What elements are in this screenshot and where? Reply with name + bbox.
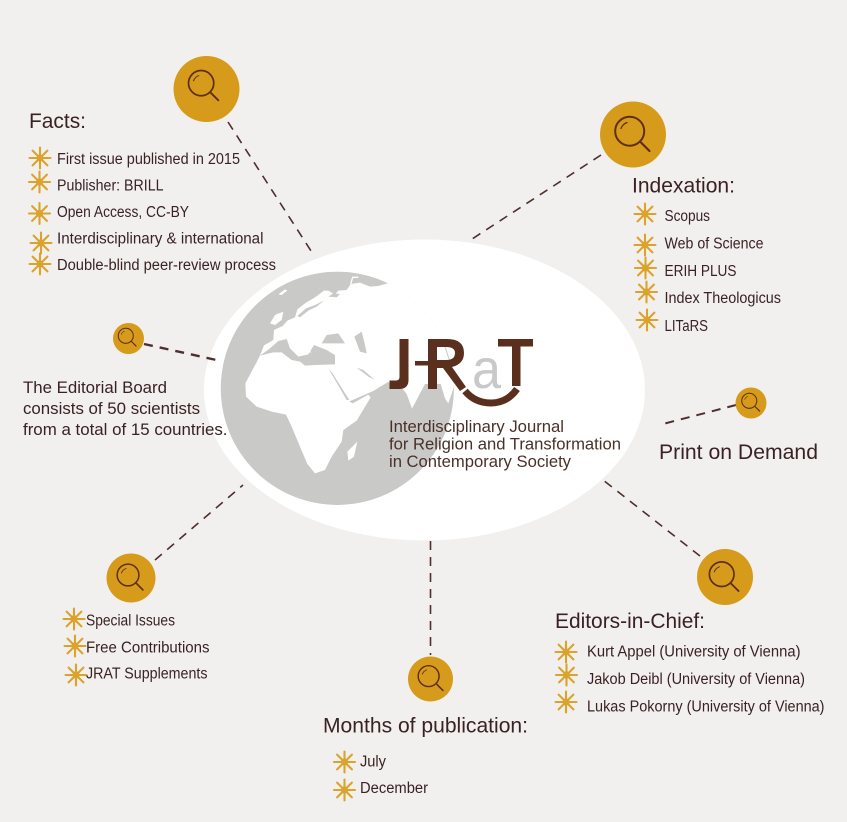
Madagascar: [347, 442, 357, 461]
logo letters J R T: [390, 339, 533, 403]
list: indexation: Web of Science: [664, 236, 764, 252]
logo subtitle: in Contemporary Society: [389, 452, 572, 471]
list: special issues: Special Issues: [86, 612, 175, 630]
text: editorial board: from a total of 15 countries.: [23, 420, 228, 439]
White Sea: [328, 293, 340, 297]
panel: editorial board: [23, 323, 228, 439]
icon: magnifier special issues: [106, 554, 156, 602]
list: indexation: [634, 204, 781, 335]
connector: editors-in-chief: [603, 480, 700, 556]
list: indexation: LITaRS: [664, 318, 708, 335]
icon: magnifier indexation: [600, 102, 666, 168]
heading: facts: Facts:: [29, 109, 86, 133]
Caspian Sea: [354, 332, 367, 353]
icon: magnifier facts: [174, 56, 240, 122]
list: editors-in-chief: Jakob Deibl (University of Vienna): [587, 671, 805, 688]
list: months: [334, 752, 428, 800]
list: months: December: [360, 780, 428, 797]
Baltic: [297, 301, 324, 317]
list: editors-in-chief: [556, 642, 824, 716]
heading: editors-in-chief: Editors-in-Chief:: [555, 609, 705, 633]
text: editorial board: [23, 378, 228, 439]
icon: magnifier editorial board: [113, 323, 144, 354]
list: special issues: [64, 608, 210, 686]
connector: special issues: [155, 485, 243, 560]
globe: [220, 272, 454, 505]
JRaT logo: [389, 337, 621, 471]
logo letter a: a: [472, 337, 502, 400]
logo subtitle: Interdisciplinary Journal: [389, 417, 564, 436]
Iceland: [278, 289, 287, 295]
list: indexation: Index Theologicus: [664, 290, 781, 307]
text: editorial board: The Editorial Board: [23, 378, 167, 397]
logo subtitle: for Religion and Transformation: [389, 434, 621, 454]
heading: indexation: Indexation:: [632, 174, 735, 198]
East Asia coastline: [445, 347, 449, 360]
list: indexation: Scopus: [664, 208, 710, 225]
list: editors-in-chief: Lukas Pokorny (University of Vienna): [587, 698, 824, 716]
heading: months: Months of publication:: [323, 714, 528, 738]
list: special issues: Free Contributions: [86, 640, 210, 656]
text: editorial board: consists of 50 scientists: [23, 399, 200, 418]
list: special issues: JRAT Supplements: [86, 666, 208, 682]
text: print on demand: Print on Demand: [659, 440, 818, 464]
connector: months: [430, 541, 432, 655]
icon: magnifier months: [408, 656, 453, 702]
central white ellipse: [204, 240, 645, 540]
panel: special issues: [64, 485, 243, 686]
panel: print on demand: [659, 388, 818, 464]
list: facts: [29, 148, 276, 274]
connector: facts: [228, 122, 313, 254]
panel: editors-in-chief: [555, 480, 824, 716]
list: months: July: [360, 754, 386, 770]
list: facts: Open Access, CC-BY: [57, 204, 189, 221]
Red Sea: [328, 368, 349, 400]
panel: months of publication: [323, 541, 528, 800]
panel: indexation: [469, 102, 781, 335]
list: facts: Double-blind peer-review process: [57, 257, 276, 274]
list: indexation: ERIH PLUS: [664, 263, 736, 280]
British Isles: [270, 312, 283, 325]
icon: magnifier editors: [697, 549, 753, 605]
logo subtitle: [389, 417, 621, 471]
list: facts: First issue published in 2015: [57, 151, 240, 168]
Persian Gulf: [357, 368, 375, 380]
connector: editorial board: [144, 344, 221, 361]
Mediterranean sea: [260, 339, 335, 366]
connector: indexation: [469, 155, 601, 241]
Black Sea: [322, 333, 345, 343]
list: editors-in-chief: Kurt Appel (University of Vienna): [587, 644, 800, 660]
panel: facts: [29, 56, 313, 274]
list: facts: Interdisciplinary & international: [57, 230, 264, 248]
connector: print on demand: [659, 405, 736, 425]
list: facts: Publisher: BRILL: [57, 178, 164, 194]
icon: magnifier print on demand: [736, 388, 766, 418]
Italy: [310, 351, 312, 352]
